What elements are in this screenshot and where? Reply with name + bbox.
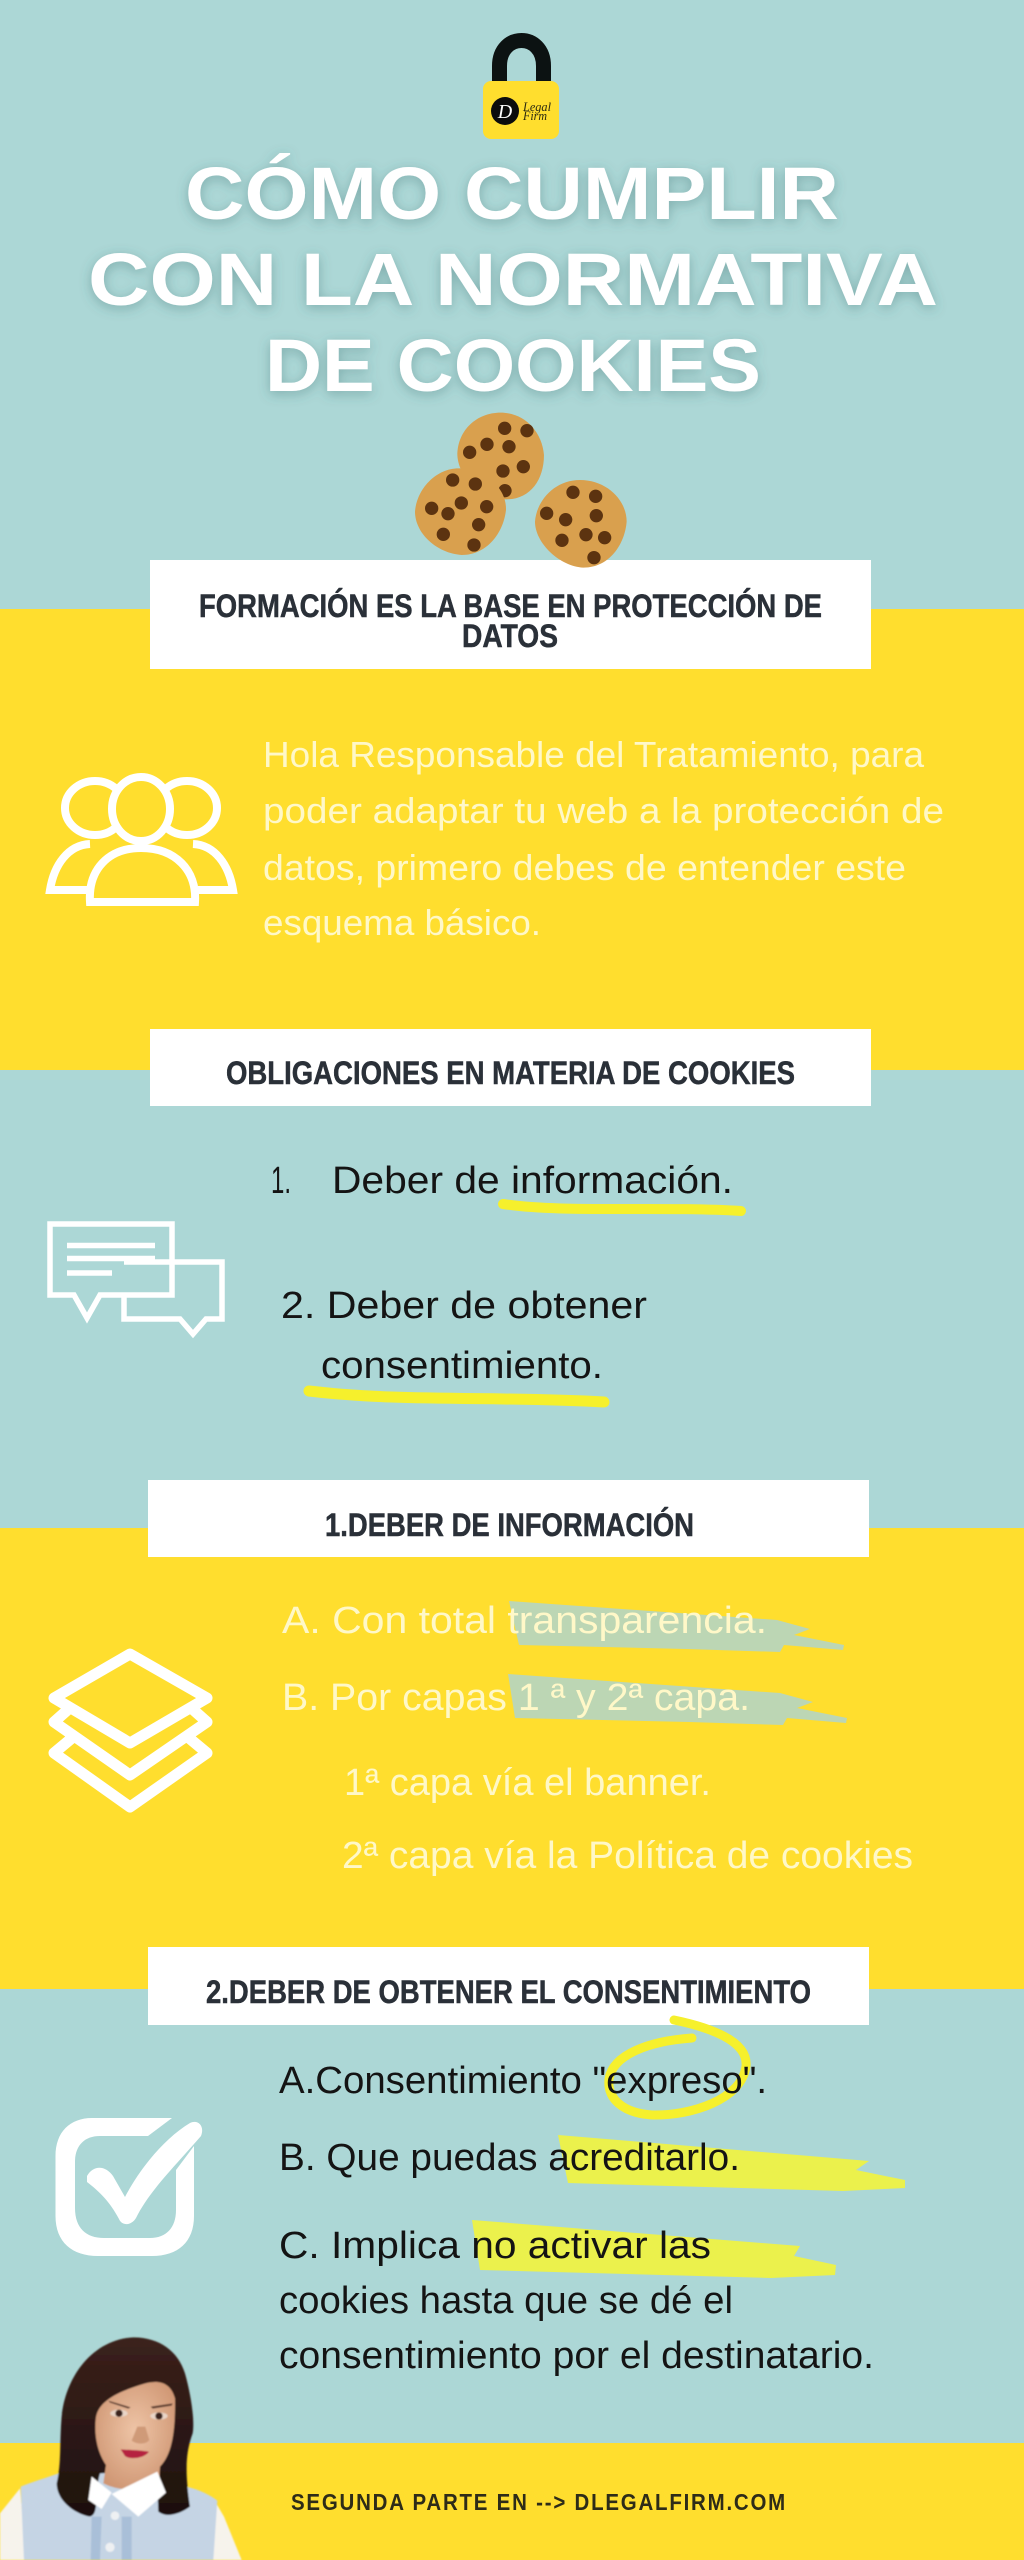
highlight: green brushes (508, 1601, 847, 1725)
icon: cookies (415, 413, 627, 568)
panel: deber de información heading (148, 1480, 869, 1557)
icon: padlock logo (483, 40, 559, 139)
panel: obligaciones heading (150, 1029, 871, 1106)
title: CON LA NORMATIVA (88, 238, 938, 321)
icon: padlock logo: D (497, 101, 513, 123)
text block: intro: esquema básico. (263, 902, 541, 943)
title (88, 152, 938, 407)
icon: layers (54, 1654, 207, 1807)
icon: people (50, 777, 233, 902)
panel: consentimiento heading: 2.DEBER DE OBTENER EL CONSENTIMIENTO (206, 1974, 811, 2010)
text block: consentimiento list: B. Que puedas acreditarlo. (279, 2137, 740, 2179)
text block: obligaciones list: Deber de información. (332, 1160, 733, 1202)
text block: obligaciones list: 1. (271, 1160, 291, 1202)
text block: consentimiento list: cookies hasta que se dé el (279, 2280, 733, 2322)
panel: deber de información heading: 1.DEBER DE INFORMACIÓN (325, 1507, 694, 1543)
text block: obligaciones list: 2. Deber de obtener (281, 1285, 647, 1327)
text block: obligaciones list: consentimiento. (321, 1345, 603, 1387)
panel: consentimiento heading (148, 1947, 869, 2025)
panel: formación heading (150, 560, 871, 669)
panel: formación heading: DATOS (462, 618, 558, 654)
icon: padlock logo: Firm (522, 108, 547, 123)
text block: consentimiento list (279, 2060, 874, 2377)
icon: checkbox (56, 2118, 202, 2256)
icon: chat bubbles (50, 1224, 222, 1334)
title: CÓMO CUMPLIR (185, 152, 839, 235)
highlight: circle and brushes (472, 2020, 905, 2278)
title: DE COOKIES (265, 324, 761, 407)
icon: padlock logo: Legal (522, 99, 551, 114)
panel: formación heading: FORMACIÓN ES LA BASE EN PROTECCIÓN DE (199, 588, 822, 624)
text block: intro: datos, primero debes de entender este (263, 847, 906, 888)
text block: consentimiento list: C. Implica no activar las (279, 2225, 711, 2267)
text block: intro: poder adaptar tu web a la protección de (263, 790, 944, 831)
text block: información list: A. Con total transparencia. (282, 1600, 767, 1642)
text block: consentimiento list: A.Consentimiento "expreso". (279, 2060, 767, 2102)
text block: intro (263, 734, 944, 943)
text block: intro: Hola Responsable del Tratamiento, para (263, 734, 925, 775)
text block: información list: 1ª capa vía el banner. (344, 1762, 711, 1804)
portrait (0, 2337, 242, 2560)
text block: información list: B. Por capas 1 ª y 2ª capa. (282, 1677, 750, 1719)
highlight: underlines (309, 1204, 741, 1402)
text block: información list: 2ª capa vía la Política de cookies (342, 1835, 913, 1877)
text block: información list (282, 1600, 913, 1877)
panel: obligaciones heading: OBLIGACIONES EN MATERIA DE COOKIES (226, 1055, 795, 1091)
footer link text: SEGUNDA PARTE EN --> DLEGALFIRM.COM (291, 2489, 787, 2515)
text block: consentimiento list: consentimiento por el destinatario. (279, 2335, 874, 2377)
text block: obligaciones list (271, 1160, 733, 1387)
